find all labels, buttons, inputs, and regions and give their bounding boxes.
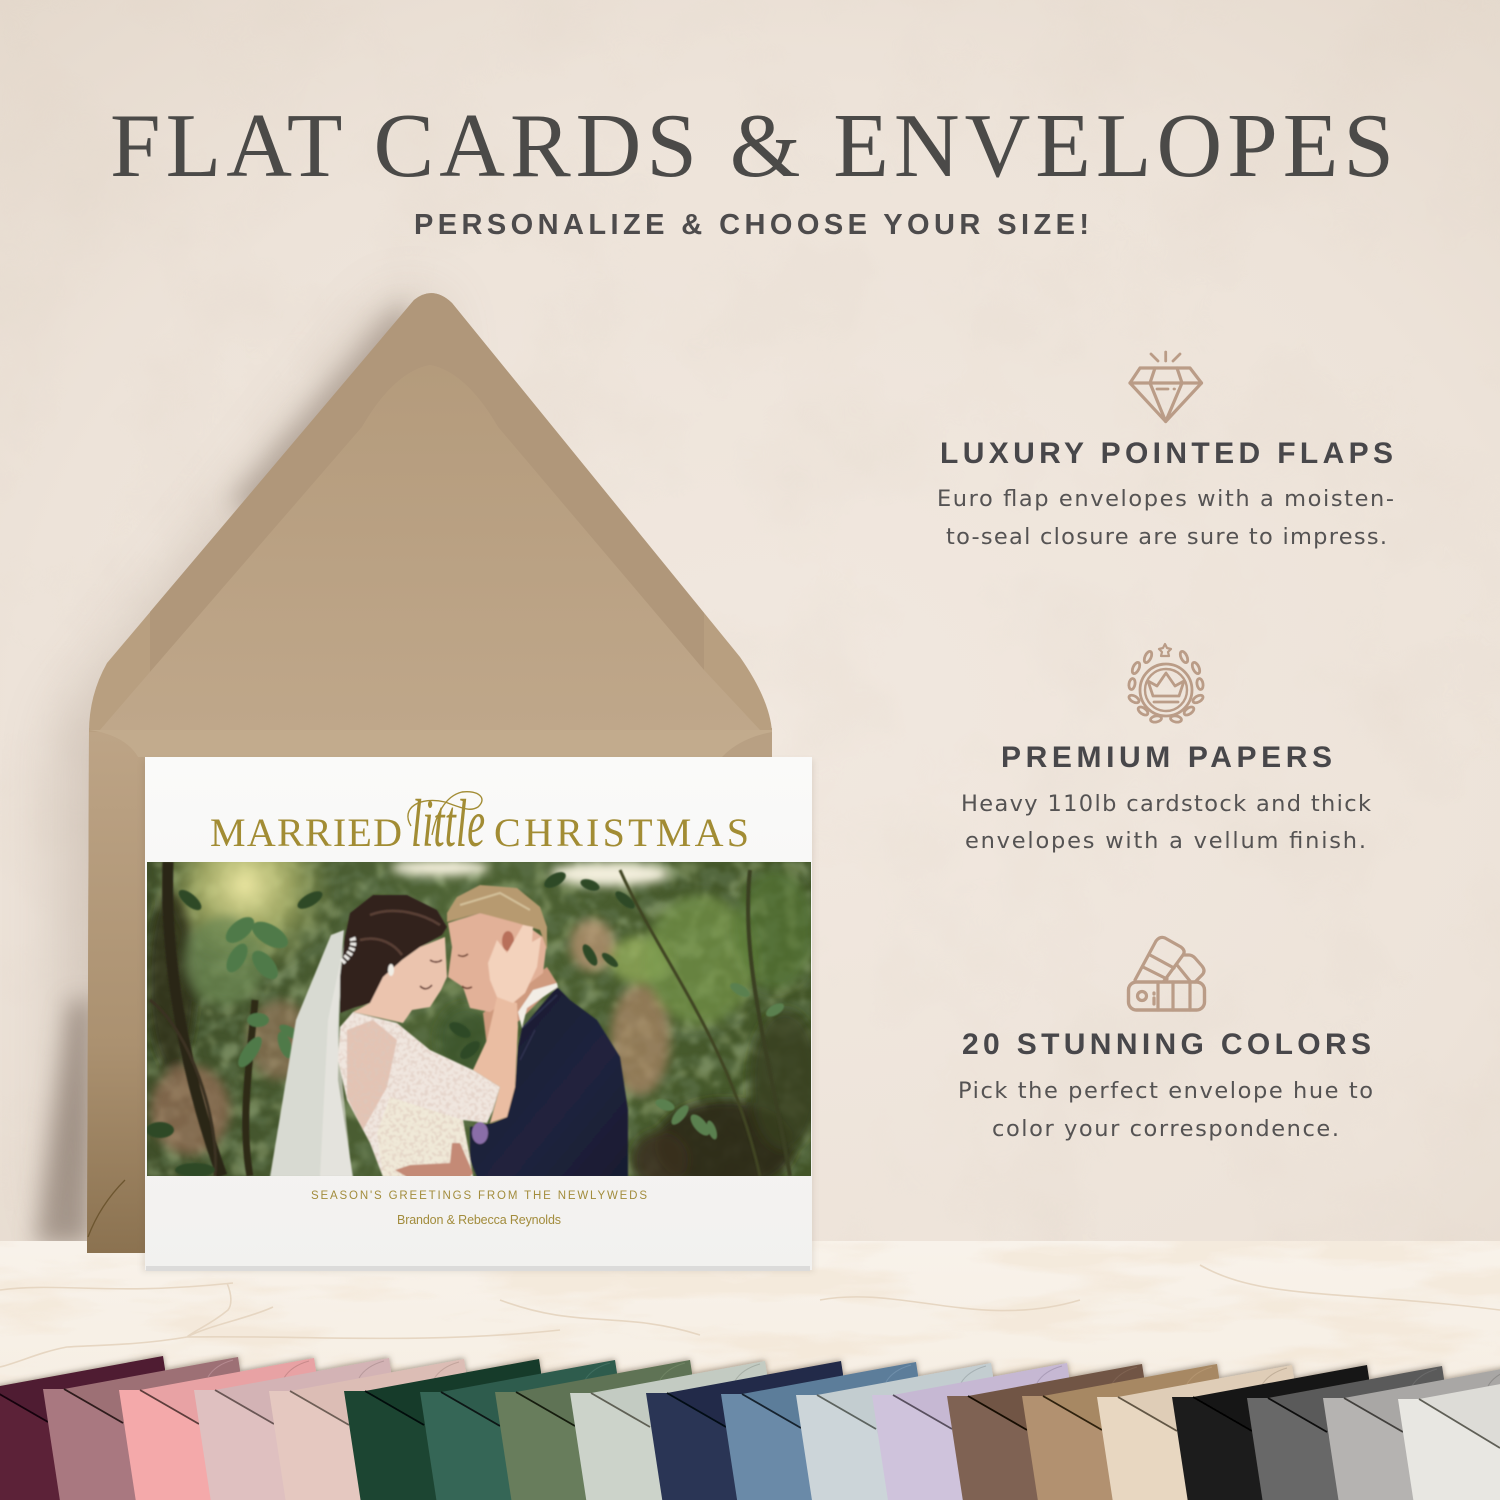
photo background light and colour xyxy=(147,862,811,1176)
card headline: MARRIED xyxy=(210,810,402,855)
feature: 20 stunning colors xyxy=(958,937,1373,1142)
groom hair xyxy=(447,885,547,950)
groom ear xyxy=(502,931,514,951)
card headline: CHRISTMAS xyxy=(494,810,749,855)
bride earring xyxy=(388,964,394,976)
photo foliage texture xyxy=(147,862,811,1176)
description xyxy=(958,1078,1373,1142)
card headline xyxy=(210,785,749,861)
swatch: rose beige xyxy=(269,1359,466,1500)
description: to-seal closure are sure to impress. xyxy=(946,524,1387,550)
card greeting: SEASON'S GREETINGS FROM THE NEWLYWEDS xyxy=(311,1190,647,1202)
envelope liner xyxy=(100,365,760,730)
heading: LUXURY POINTED FLAPS xyxy=(940,437,1393,470)
heading: PREMIUM PAPERS xyxy=(1001,741,1332,774)
description: Pick the perfect envelope hue to xyxy=(958,1078,1373,1104)
flower xyxy=(472,1122,488,1144)
swatch: white xyxy=(1398,1367,1500,1500)
envelope side panel xyxy=(87,732,145,1253)
groom suit xyxy=(470,987,628,1177)
envelope body xyxy=(87,728,772,1253)
groom face xyxy=(448,913,547,1012)
envelope top band xyxy=(89,730,772,757)
description: Heavy 110lb cardstock and thick xyxy=(961,791,1371,817)
title: FLAT CARDS & ENVELOPES xyxy=(110,95,1394,196)
subtitle: PERSONALIZE & CHOOSE YOUR SIZE! xyxy=(414,209,1089,241)
swatch: forest green xyxy=(344,1359,541,1500)
card photo xyxy=(146,795,820,1190)
envelope shadow on wall xyxy=(35,300,440,1245)
bride hair pin xyxy=(342,937,353,962)
swatch: lilac xyxy=(872,1363,1069,1500)
envelope flap xyxy=(89,293,772,732)
groom collar xyxy=(518,983,558,1028)
icon: crown badge xyxy=(1128,644,1204,723)
description: color your correspondence. xyxy=(992,1116,1339,1142)
description xyxy=(961,791,1371,854)
swatch: dusty blue xyxy=(721,1362,918,1500)
lace texture xyxy=(330,1010,505,1180)
swatch: charcoal xyxy=(1247,1366,1444,1500)
swatch: black xyxy=(1172,1365,1369,1500)
veil xyxy=(270,930,353,1177)
swatch: sage xyxy=(495,1360,692,1500)
bride hair xyxy=(340,895,447,1013)
icon: colour swatch fan xyxy=(1128,937,1204,1010)
swatch: brown xyxy=(947,1364,1144,1500)
swatch: pink xyxy=(119,1358,316,1500)
bride mesh panel xyxy=(347,1020,397,1130)
feature: luxury pointed flaps xyxy=(937,352,1394,550)
bride hand xyxy=(488,925,541,1003)
marble floor xyxy=(0,1241,1500,1500)
swatch: mauve xyxy=(43,1357,240,1500)
envelope flap dark band xyxy=(150,293,704,672)
groom hand xyxy=(395,1143,473,1177)
icon: diamond xyxy=(1130,352,1202,422)
envelope xyxy=(87,293,772,1253)
swatch: teal green xyxy=(420,1360,617,1500)
groom features xyxy=(458,954,472,988)
photo branches and leaves xyxy=(146,862,790,1177)
description: Euro flap envelopes with a moisten- xyxy=(937,486,1394,512)
card shadow xyxy=(142,760,814,1272)
swatch: tan xyxy=(1022,1364,1219,1500)
description: envelopes with a vellum finish. xyxy=(965,828,1366,854)
swatch: silver xyxy=(1323,1366,1500,1500)
swatch: pale sage xyxy=(570,1361,767,1500)
swatch: navy xyxy=(646,1361,843,1500)
photo couple xyxy=(270,885,628,1180)
heading: 20 STUNNING COLORS xyxy=(962,1028,1371,1061)
groom neck xyxy=(483,967,557,1047)
swatch: pale blue xyxy=(796,1363,993,1500)
description xyxy=(937,486,1394,550)
swatch: cream xyxy=(1097,1365,1294,1500)
swatch: blush xyxy=(194,1358,391,1500)
flat card xyxy=(145,757,820,1271)
swatch: burgundy xyxy=(0,1356,165,1500)
bride features xyxy=(420,960,442,989)
bride dress xyxy=(338,1012,500,1177)
feature: premium papers xyxy=(961,644,1371,854)
card headline: little xyxy=(411,785,485,861)
bride face and neck xyxy=(353,937,447,1023)
card names: Brandon & Rebecca Reynolds xyxy=(397,1213,561,1227)
envelope colour swatches xyxy=(0,1356,1500,1500)
bride arm xyxy=(473,997,518,1123)
bride bodice xyxy=(377,1097,473,1177)
